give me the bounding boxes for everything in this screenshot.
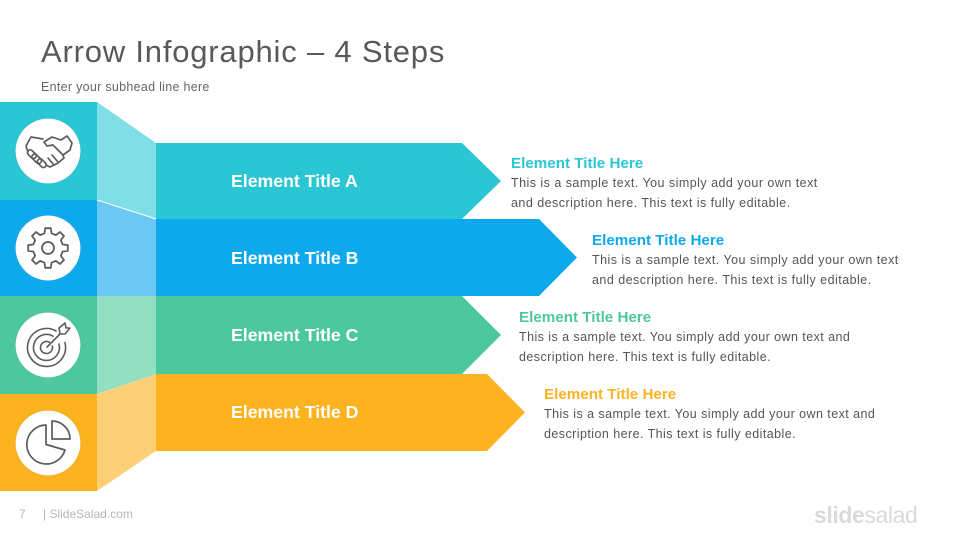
text block: step D [544, 386, 875, 441]
label: Element Title B: Element Title B [231, 248, 358, 268]
text block: step D: This is a sample text. You simply add your own text and [544, 407, 875, 421]
text block: step C: Element Title Here [519, 309, 651, 326]
footer site: | SlideSalad.com [43, 507, 133, 521]
text block: step B: Element Title Here [592, 232, 724, 249]
text block: step C [519, 309, 850, 364]
panel: step C column [0, 296, 156, 394]
panel: step A column [0, 102, 156, 219]
panel: step D column [0, 374, 156, 491]
arrow: Element Title D [156, 374, 525, 451]
panel: step B column [0, 200, 156, 296]
text block: step C: description here. This text is fully editable. [519, 350, 771, 364]
arrow: Element Title B [156, 219, 577, 296]
arrow: Element Title C [156, 296, 501, 374]
text block: step B: This is a sample text. You simply add your own text [592, 253, 899, 267]
page number: 7 [19, 507, 26, 521]
icon: target with arrow [16, 312, 80, 378]
label: Element Title A: Element Title A [231, 171, 358, 191]
label: Element Title D: Element Title D [231, 402, 358, 422]
text block: step D: description here. This text is fully editable. [544, 427, 796, 441]
text block: step A: Element Title Here [511, 155, 643, 172]
text block: step C: This is a sample text. You simply add your own text and [519, 330, 850, 344]
icon: handshake [16, 118, 80, 184]
text block: step B [592, 232, 899, 287]
text block: step A: and description here. This text is fully editable. [511, 196, 791, 210]
text block: step A: This is a sample text. You simply add your own text [511, 176, 818, 190]
icon: gear [16, 216, 80, 280]
text block: step D: Element Title Here [544, 386, 676, 403]
arrow: Element Title A [156, 143, 501, 219]
icon: pie chart [16, 410, 80, 476]
logo wordmark: slidesalad [814, 502, 917, 528]
text block: step A [511, 155, 818, 210]
text block: step B: and description here. This text is fully editable. [592, 273, 872, 287]
title: Arrow Infographic – 4 Steps [41, 34, 445, 69]
label: Element Title C: Element Title C [231, 325, 358, 345]
subhead: Enter your subhead line here [41, 80, 210, 94]
